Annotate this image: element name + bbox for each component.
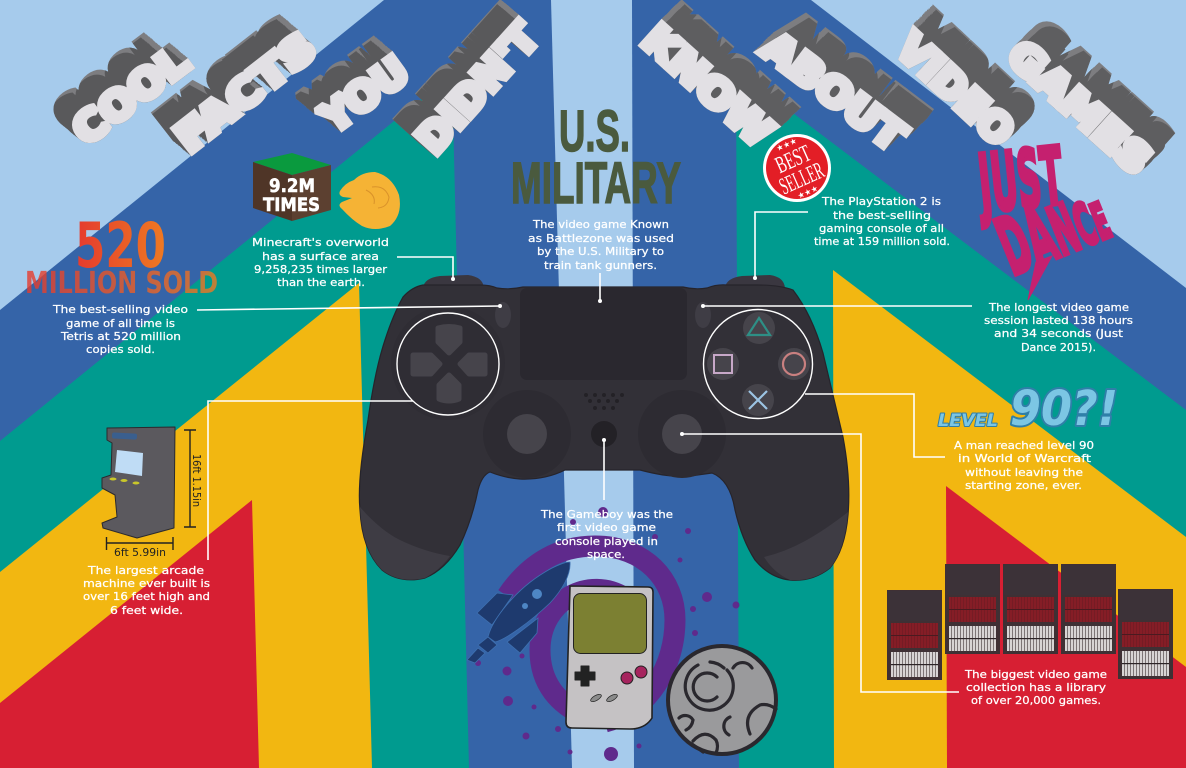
badge: best seller: ★★★ bbox=[775, 136, 798, 153]
game controller bbox=[359, 275, 849, 580]
text: arcade fact: machine ever built is bbox=[83, 577, 210, 590]
arcade height dimension: 16ft 1.15in bbox=[190, 454, 203, 507]
text: battlezone fact: as Battlezone was used bbox=[528, 232, 674, 245]
text: gameboy fact bbox=[540, 508, 673, 561]
text: minecraft fact bbox=[252, 236, 389, 289]
text: gameboy fact: space. bbox=[587, 548, 625, 561]
purple dots bbox=[475, 507, 740, 761]
text: arcade fact: The largest arcade bbox=[87, 564, 204, 577]
icon: rocket bbox=[467, 562, 570, 663]
title: know about video games bbox=[633, 16, 1160, 184]
text: world of warcraft fact: without leaving the bbox=[965, 466, 1083, 479]
badge: best seller bbox=[763, 131, 831, 206]
text: arcade fact bbox=[83, 564, 210, 617]
icon: moon bbox=[668, 646, 776, 754]
touchpad bbox=[520, 288, 687, 380]
text: world of warcraft fact: in World of Warcraft bbox=[958, 452, 1092, 465]
title word: you: YOU bbox=[311, 48, 418, 143]
text: longest session fact: The longest video game bbox=[988, 301, 1129, 314]
text: battlezone fact: The video game Known bbox=[532, 218, 669, 231]
text: gameboy fact: The Gameboy was the bbox=[540, 508, 673, 521]
text: world of warcraft fact bbox=[954, 439, 1094, 492]
text: tetris fact: Tetris at 520 million bbox=[60, 330, 181, 343]
text: minecraft fact: than the earth. bbox=[277, 276, 365, 289]
heading: 520 million sold bbox=[25, 209, 218, 301]
text: tetris fact: copies sold. bbox=[86, 343, 155, 356]
arcade height dimension bbox=[106, 430, 203, 559]
heading: level 90: LEVEL bbox=[938, 411, 998, 431]
title word: video: VIDEO bbox=[887, 25, 1023, 155]
d-pad bbox=[413, 326, 485, 401]
option buttons bbox=[495, 302, 511, 328]
text: gameboy fact: first video game bbox=[557, 521, 656, 534]
text: battlezone fact bbox=[528, 218, 674, 272]
title word: cool: COOL bbox=[64, 38, 197, 154]
logo: just dance bbox=[972, 130, 1121, 300]
arcade height dimension: 6ft 5.99in bbox=[114, 546, 166, 559]
speaker dots bbox=[584, 393, 624, 410]
callout lines bbox=[197, 212, 972, 692]
text: playstation 2 fact: The PlayStation 2 is bbox=[821, 195, 941, 208]
action buttons bbox=[707, 312, 810, 416]
text: longest session fact: session lasted 138 hours bbox=[984, 314, 1133, 327]
text: gameboy fact: console played in bbox=[555, 535, 658, 548]
text: longest session fact bbox=[984, 301, 1133, 354]
icon: game cartridges bbox=[887, 564, 1173, 680]
heading: U.S. Military: U.S. bbox=[559, 99, 630, 164]
button highlight rings bbox=[397, 310, 812, 418]
icon: arcade machine bbox=[102, 427, 175, 538]
purple spiral bbox=[507, 546, 675, 722]
icon: minecraft block: TIMES bbox=[263, 194, 320, 216]
badge: best seller: ★★★ bbox=[796, 184, 819, 201]
icon: pinching hand bbox=[339, 172, 400, 229]
text: minecraft fact: 9,258,235 times larger bbox=[254, 263, 387, 276]
text: tetris fact: The best-selling video bbox=[52, 303, 188, 316]
text: game collection fact: The biggest video game bbox=[964, 668, 1107, 681]
text: battlezone fact: by the U.S. Military to bbox=[537, 245, 664, 258]
text: battlezone fact: train tank gunners. bbox=[544, 259, 657, 272]
text: minecraft fact: Minecraft's overworld bbox=[252, 236, 389, 249]
controller body bbox=[359, 285, 849, 580]
grip highlights bbox=[360, 507, 848, 580]
illustration: space scene with gameboy bbox=[467, 507, 776, 761]
icon: minecraft block: 9.2M bbox=[269, 175, 315, 197]
heading: 520 million sold: 520 bbox=[75, 209, 166, 282]
heading: level 90 bbox=[938, 381, 1118, 437]
title: cool facts you didn't bbox=[64, 14, 549, 163]
text: game collection fact: collection has a library bbox=[966, 681, 1107, 694]
text: world of warcraft fact: A man reached level 90 bbox=[954, 439, 1094, 452]
text: world of warcraft fact: starting zone, ever. bbox=[965, 479, 1082, 492]
text: arcade fact: 6 feet wide. bbox=[110, 604, 183, 617]
text: playstation 2 fact: gaming console of all bbox=[819, 222, 944, 235]
text: longest session fact: Dance 2015). bbox=[1021, 341, 1096, 354]
heading: U.S. Military: MILITARY bbox=[511, 151, 681, 216]
text: tetris fact: game of all time is bbox=[66, 317, 175, 330]
text: playstation 2 fact: time at 159 million sold. bbox=[814, 235, 950, 248]
text: playstation 2 fact bbox=[814, 195, 950, 248]
logo: just dance: JUST bbox=[972, 130, 1068, 231]
heading: 520 million sold: MILLION SOLD bbox=[25, 266, 218, 301]
title word: games: GAMES bbox=[998, 32, 1160, 184]
text: game collection fact bbox=[964, 668, 1107, 707]
d-pad well bbox=[391, 306, 505, 420]
text: arcade fact: over 16 feet high and bbox=[83, 590, 210, 603]
text: minecraft fact: has a surface area bbox=[262, 250, 379, 263]
heading: level 90: 90?! bbox=[1010, 381, 1118, 437]
badge: best seller: BEST bbox=[772, 140, 815, 179]
text: game collection fact: of over 20,000 games. bbox=[971, 694, 1101, 707]
title word: about: ABOUT bbox=[753, 24, 914, 161]
analog sticks bbox=[483, 390, 726, 478]
text: tetris fact bbox=[52, 303, 188, 356]
title word: know: KNOW bbox=[633, 16, 781, 156]
text: longest session fact: and 34 seconds (Just bbox=[994, 327, 1124, 340]
logo: just dance: DANCE bbox=[984, 166, 1121, 294]
icon: gameboy bbox=[566, 586, 653, 729]
badge: best seller: SELLER bbox=[776, 158, 828, 200]
shoulder buttons bbox=[423, 275, 785, 288]
text: playstation 2 fact: the best-selling bbox=[833, 209, 931, 222]
home button bbox=[591, 421, 617, 447]
title word: facts: FACTS bbox=[167, 25, 325, 162]
title word: didn't: DIDN'T bbox=[408, 14, 549, 163]
icon: minecraft block bbox=[253, 153, 331, 221]
heading: U.S. Military bbox=[511, 99, 681, 216]
